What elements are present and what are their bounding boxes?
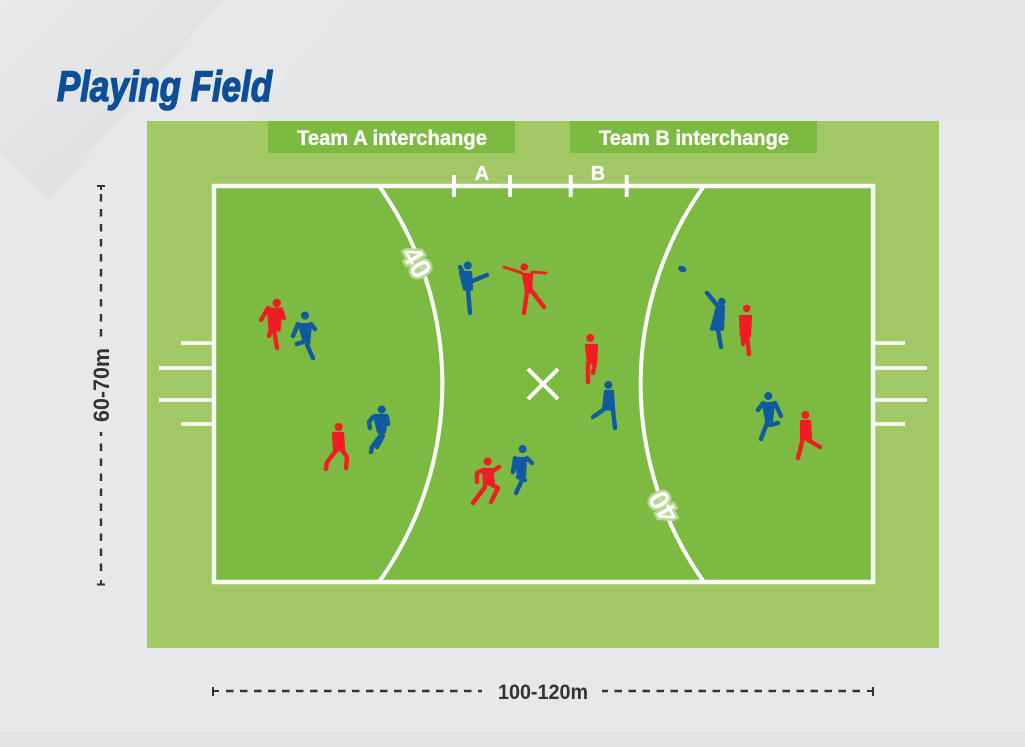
player: blue centre (593, 381, 615, 428)
field surround (147, 121, 939, 648)
dimension: field width: 60-70m (89, 348, 114, 422)
player: red runner left (261, 299, 284, 348)
centre cross (528, 369, 558, 399)
player: red sprinter bottom (473, 458, 499, 503)
dimension: field length: 100-120m (498, 681, 588, 704)
player: red runner lower left (326, 423, 347, 469)
dimension: field width (89, 186, 114, 584)
left 40 label: 40 (395, 241, 438, 283)
right 40 label: 40 (642, 486, 685, 528)
panel: Team B interchange: Team B interchange (599, 127, 789, 150)
panel: Team B interchange (570, 121, 817, 153)
label A: A (475, 163, 489, 185)
player: red centre (586, 334, 596, 382)
player: blue kicker (460, 262, 487, 313)
label B: B (591, 163, 605, 185)
panel: Team A interchange (268, 121, 515, 153)
player: blue runner right (758, 392, 781, 439)
player: blue runner bottom (513, 445, 532, 493)
player: red defender right (740, 305, 750, 354)
panel: Team A interchange: Team A interchange (297, 127, 487, 150)
interchange ticks (454, 175, 627, 197)
player: blue runner lower left (369, 406, 388, 452)
panel: playing field (147, 121, 939, 648)
player: blue runner left (293, 312, 315, 358)
right goal posts (873, 343, 927, 424)
right 40m arc (641, 186, 704, 582)
title: Playing Field (57, 63, 273, 111)
field of play (214, 186, 873, 582)
dimension: field length (213, 681, 873, 704)
left 40m arc (379, 186, 442, 582)
player: red runner right (798, 411, 820, 458)
player: red with arms out (504, 264, 546, 313)
icon: ball (677, 265, 687, 273)
player: blue jumper (707, 293, 725, 347)
left goal posts (159, 343, 213, 424)
